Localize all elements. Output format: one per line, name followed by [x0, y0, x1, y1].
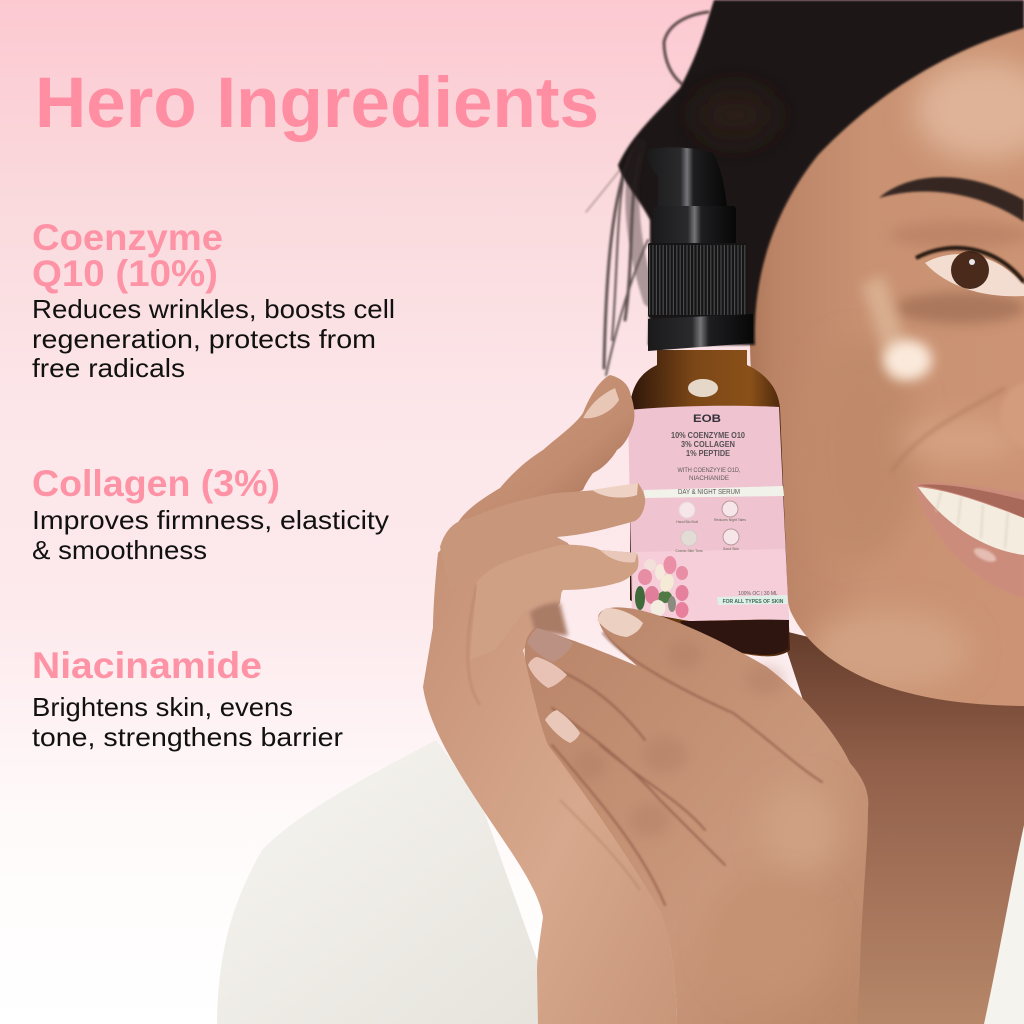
- pump nozzle: [647, 147, 727, 208]
- title: Hero Ingredients: [35, 64, 599, 143]
- face: [740, 20, 1024, 710]
- photo: woman holding serum bottle: [217, 0, 1024, 1024]
- label: 1% PEPTIDE: [686, 449, 731, 458]
- text: coenzyme description: free radicals: [32, 353, 185, 383]
- bottle base: [680, 620, 789, 655]
- label: 100% OC | 30 ML: [738, 591, 778, 597]
- label: WITH COENZYYIE O1D,: [678, 467, 741, 474]
- collar: [984, 825, 1024, 1024]
- label: 10% COENZYME O10: [671, 431, 745, 440]
- heading: coenzyme q10: Q10 (10%): [32, 253, 218, 294]
- knuckle shading: [574, 642, 785, 837]
- text: niacinamide description: [32, 692, 343, 752]
- label: FOR ALL TYPES OF SKIN: [723, 599, 784, 605]
- label: [628, 406, 789, 621]
- amber glass: [630, 350, 790, 656]
- middle finger: [440, 483, 645, 590]
- heading: collagen: Collagen (3%): [32, 463, 280, 504]
- eyebrow: [879, 177, 1024, 222]
- neck: [780, 630, 1024, 1024]
- heading: coenzyme q10: [32, 217, 223, 294]
- shadow under ring finger: [530, 603, 568, 636]
- label: EOB: [693, 413, 721, 425]
- hair: [586, 0, 1024, 375]
- section: coenzyme q10: [32, 217, 395, 383]
- label: DAY & NIGHT SERUM: [678, 489, 740, 496]
- left hand creases: [468, 585, 640, 890]
- jacket: [217, 740, 560, 1024]
- heading: niacinamide: Niacinamide: [32, 645, 262, 686]
- label: 3% COLLAGEN: [681, 440, 735, 449]
- serum bottle: [628, 147, 790, 656]
- left hand palm and wrist: [423, 500, 677, 1024]
- label: Sond Skin: [723, 547, 739, 551]
- label: Reduces Night Tales: [714, 518, 746, 522]
- section: niacinamide: [32, 645, 343, 752]
- eye: [916, 248, 1024, 296]
- text: collagen description: [32, 505, 389, 565]
- index fingernail: [583, 388, 619, 418]
- ring fingernail: [600, 550, 637, 562]
- pump collar: [653, 206, 736, 248]
- ribbed cap: [648, 243, 747, 317]
- text: niacinamide description: Brightens skin, evens: [32, 692, 293, 722]
- text: coenzyme description: regeneration, protects from: [32, 324, 376, 354]
- middle fingernail: [592, 483, 638, 498]
- ring finger: [470, 545, 638, 660]
- section: collagen: [32, 463, 389, 565]
- label: Hand Bio Butt: [676, 520, 698, 524]
- text: niacinamide description: tone, strengthens barrier: [32, 722, 343, 752]
- label: NIACHIANIDE: [689, 475, 730, 482]
- text: collagen description: Improves firmness, elasticity: [32, 505, 389, 535]
- hair wisps: [586, 12, 708, 375]
- cap base: [648, 314, 753, 351]
- text: collagen description: & smoothness: [32, 535, 207, 565]
- text: coenzyme description: [32, 294, 395, 383]
- text: coenzyme description: Reduces wrinkles, boosts cell: [32, 294, 395, 324]
- right hand: [525, 607, 868, 1024]
- label: Cosmo Skin Tons: [675, 549, 703, 553]
- index finger: [455, 375, 634, 528]
- heading: coenzyme q10: Coenzyme: [32, 217, 223, 258]
- finger separations: [535, 633, 822, 905]
- right hand fingernails: [597, 608, 643, 637]
- smile: [913, 482, 1024, 598]
- tulip flowers: [635, 556, 688, 618]
